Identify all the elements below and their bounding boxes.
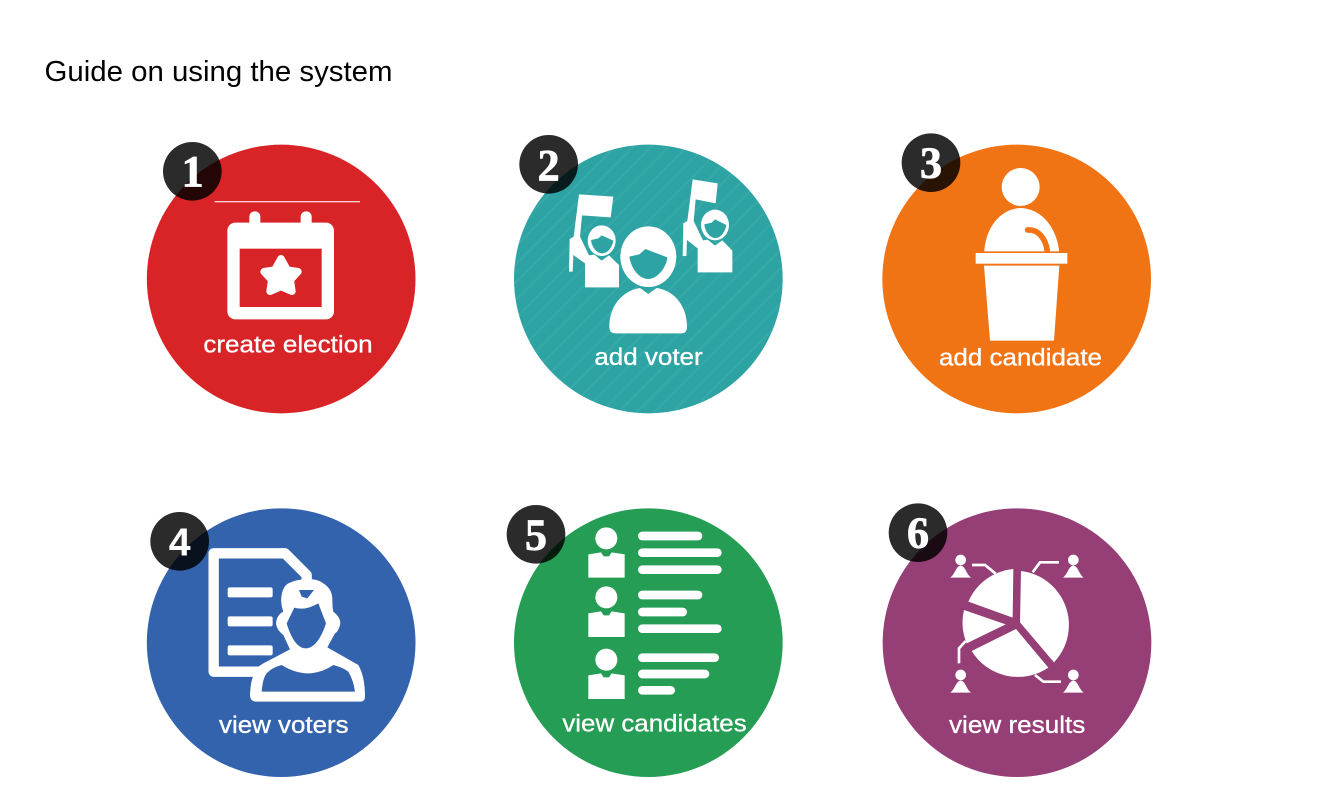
title: Guide on using the system: [44, 56, 392, 88]
number badge 1: 1: [182, 147, 204, 196]
candidate row 1: [588, 527, 717, 578]
red circle: [147, 145, 415, 413]
panel: create election: [147, 142, 415, 413]
candidate row 2: [588, 586, 717, 637]
right flag figure: [683, 179, 732, 272]
icon: speaker at podium: [976, 168, 1067, 341]
teal striped circle: [514, 145, 783, 413]
icon: calendar with star: [227, 211, 334, 319]
panel: view results: [883, 503, 1151, 777]
number badge 6: [889, 503, 947, 562]
icon: pie chart with people: [950, 555, 1084, 693]
connector lines: [959, 562, 1061, 682]
label: view candidates: [562, 711, 747, 738]
number badge 5: 5: [525, 510, 547, 559]
label: view results: [949, 712, 1085, 739]
label: view voters: [219, 712, 349, 739]
number badge 4: 4: [169, 521, 191, 565]
orange circle: [882, 145, 1151, 413]
number badge 6: 6: [907, 508, 929, 557]
divider line: [215, 201, 360, 202]
number badge 3: 3: [920, 139, 942, 188]
green circle: [514, 508, 783, 777]
label: add candidate: [939, 344, 1102, 371]
icon: candidate rows: [588, 527, 717, 699]
icon: voters with flags: [569, 179, 732, 333]
number badge 1: [163, 142, 222, 201]
number badge 5: [507, 505, 565, 564]
purple circle: [883, 508, 1151, 777]
panel: add voter: [514, 135, 783, 413]
icon: document and voter: [214, 553, 365, 702]
central figure: [609, 226, 687, 333]
number badge 2: [519, 135, 578, 194]
label: add voter: [594, 344, 703, 371]
number badge 2: 2: [538, 141, 560, 190]
number badge 3: [902, 133, 960, 192]
people icons: [950, 555, 1084, 693]
number badge 4: [150, 512, 209, 571]
panel: view voters: [147, 508, 415, 777]
candidate row 3: [588, 649, 715, 699]
left flag figure: [569, 194, 619, 287]
blue circle: [147, 508, 415, 777]
label: create election: [203, 332, 373, 359]
panel: view candidates: [507, 505, 783, 777]
pie chart: [963, 569, 1069, 677]
panel: add candidate: [882, 133, 1151, 413]
